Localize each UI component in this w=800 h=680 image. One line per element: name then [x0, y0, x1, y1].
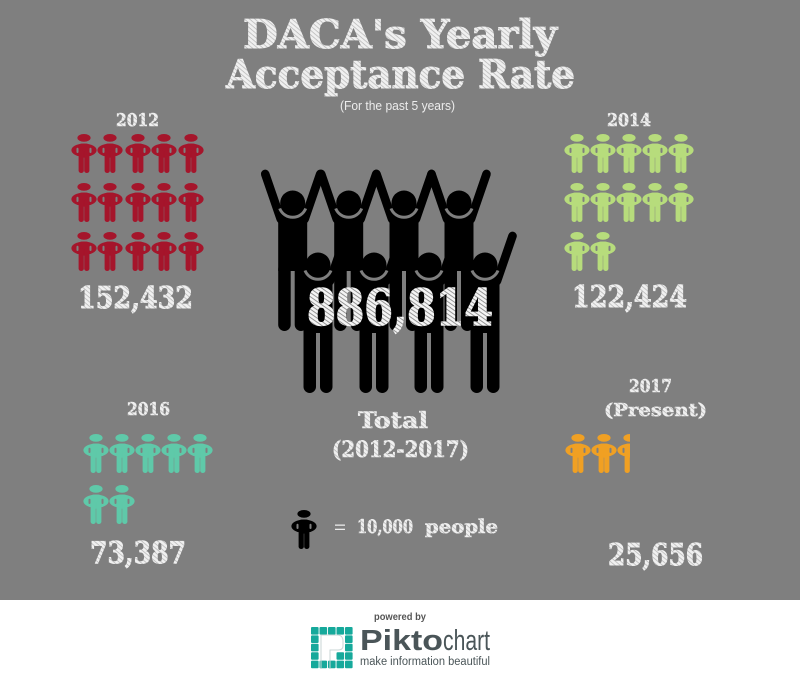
legend text — [334, 516, 498, 538]
legend — [291, 510, 498, 549]
panel: 2016 — [83, 399, 213, 571]
panel: 2012 — [71, 110, 204, 316]
wordmark: Piktochart: chart — [443, 625, 490, 657]
panel: total — [265, 174, 512, 463]
year label: 2017 (Present): 2017 — [629, 376, 672, 397]
number: 886,814: 886,814 — [307, 278, 493, 337]
tagline: make information beautiful — [360, 656, 490, 668]
label: total: Total — [358, 408, 428, 434]
pictogram: 2012 people — [71, 134, 204, 271]
legend text: = — [334, 518, 346, 537]
year label: 2017 (Present) — [604, 376, 707, 421]
icon: legend person — [291, 510, 317, 549]
number: 122,424: 122,424 — [572, 280, 687, 315]
footer — [0, 600, 800, 680]
icon: Piktochart logo — [311, 627, 353, 669]
number: 152,432: 152,432 — [78, 281, 193, 316]
panel: 2014 — [564, 110, 694, 315]
pictogram: 2017 people — [565, 434, 630, 473]
year label: 2012: 2012 — [116, 110, 159, 131]
title: DACA's Yearly — [243, 12, 558, 58]
label: total: (2012-2017) — [332, 437, 469, 463]
pictogram: 2014 people — [564, 134, 694, 271]
icon: crowd of cheering figures — [265, 174, 512, 393]
pictogram: 2016 people — [83, 434, 213, 524]
title — [225, 12, 575, 98]
year label: 2016: 2016 — [127, 399, 170, 420]
legend text: 10,000 — [357, 516, 413, 538]
subtitle: (For the past 5 years) — [340, 98, 455, 113]
number: 73,387: 73,387 — [90, 536, 186, 571]
wordmark: Piktochart: Pikto — [360, 625, 443, 657]
wordmark: Piktochart — [360, 625, 490, 657]
panel: 2017 — [565, 376, 707, 573]
year label: 2014: 2014 — [607, 110, 651, 131]
year label: 2017 (Present): (Present) — [604, 400, 707, 421]
number: 25,656: 25,656 — [608, 538, 703, 573]
text: powered by: powered by — [374, 611, 426, 623]
title: Acceptance Rate — [225, 52, 575, 98]
label: total — [332, 408, 469, 463]
legend text: people — [425, 516, 498, 538]
